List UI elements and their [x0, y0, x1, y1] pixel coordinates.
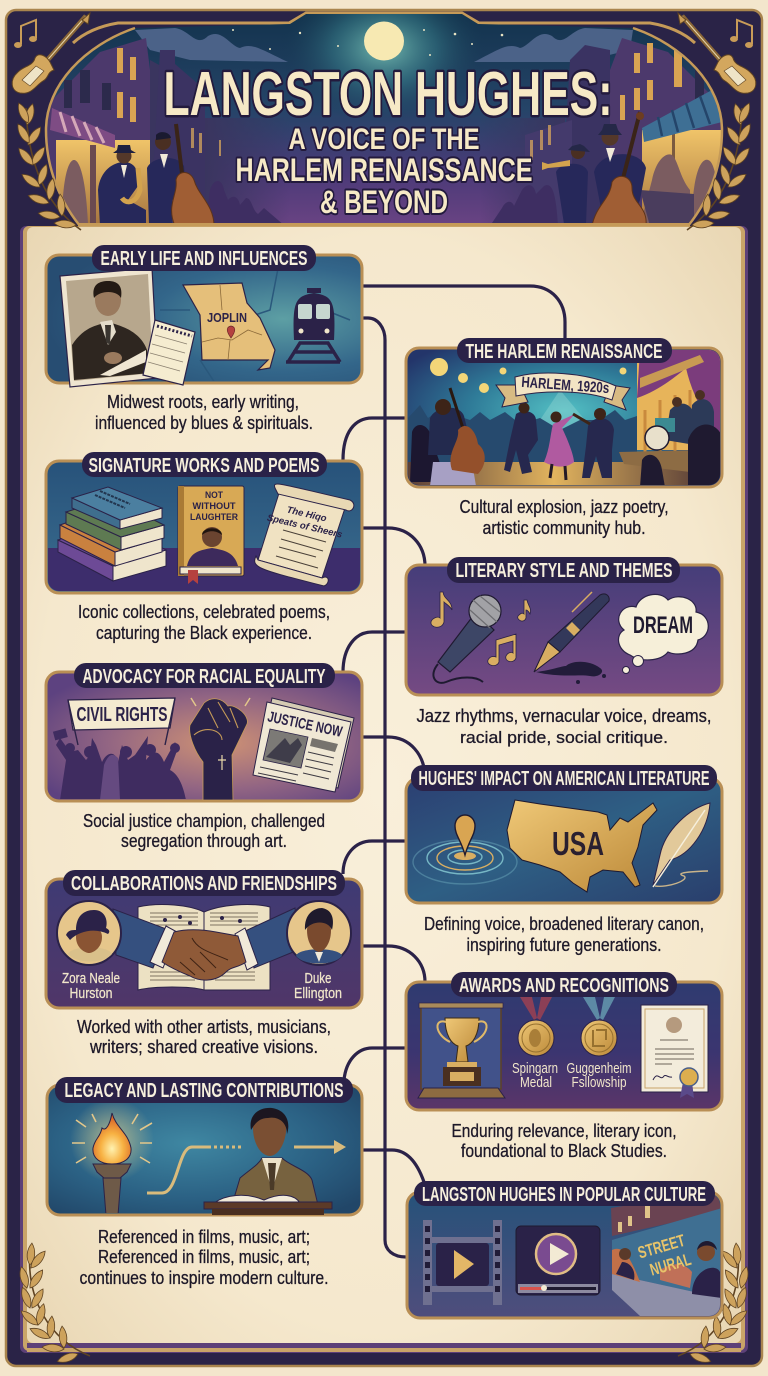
icon: Missouri map [183, 283, 275, 370]
text: advocacy [83, 811, 325, 851]
heading pill: COLLABORATIONS AND FRIENDSHIPS [71, 873, 337, 895]
icon: book stack [58, 487, 166, 581]
title [164, 60, 612, 220]
labels: names: Zora Neale [62, 970, 120, 987]
labels: names: Hurston [70, 985, 112, 1002]
timeline connectors [343, 286, 565, 1257]
laurel: bottom left [18, 1243, 90, 1365]
text: signature works: Iconic collections, celebrated poems, [78, 602, 330, 622]
heading pill: LEGACY AND LASTING CONTRIBUTIONS [64, 1080, 344, 1102]
icon: newspaper: JUSTICE NOW [266, 708, 344, 741]
icon: video player [516, 1226, 600, 1295]
icon: scroll poem: Speats of Sheers [266, 513, 343, 541]
panel: The Harlem Renaissance [406, 338, 722, 487]
heading pill [447, 557, 680, 583]
panel: Hughes' Impact on American Literature [406, 765, 722, 903]
laurel: bottom right [678, 1243, 750, 1365]
text: collaborations [77, 1017, 331, 1057]
icon: Spingarn medal: Spingarn [512, 1060, 558, 1077]
icon: train [286, 288, 340, 362]
icon: film strip [423, 1220, 502, 1305]
heading pill [92, 245, 316, 271]
dance floor [408, 462, 688, 485]
arrow: path of legacy [147, 1140, 346, 1193]
text: advocacy: Social justice champion, challenged [83, 811, 325, 831]
panel: Advocacy for Racial Equality: CIVIL RIGHTS [76, 704, 168, 726]
heading pill [457, 338, 672, 363]
text: impact: inspiring future generations. [466, 935, 662, 955]
title: & BEYOND [320, 184, 448, 220]
stars [232, 29, 503, 56]
clouds [135, 28, 288, 62]
icon: guitar left with note [12, 13, 90, 93]
icon: quill feather [653, 803, 710, 887]
text: signature works [78, 602, 330, 643]
heading pill [74, 663, 335, 688]
text: early life [95, 392, 313, 433]
lights and light rays [430, 358, 626, 393]
upright bass player (right) [592, 112, 646, 226]
icon: location pin with ripples [413, 815, 517, 884]
icon: notepad [143, 320, 195, 385]
text: harlem renaissance [460, 497, 668, 538]
icon: book Not Without Laughter: WITHOUT [192, 501, 236, 512]
text: legacy: Referenced in films, music, art; [98, 1247, 310, 1267]
text: early life: influenced by blues & spirituals. [95, 413, 313, 433]
icon: guitar right with note [678, 13, 756, 93]
dancers [504, 411, 538, 474]
heading pill [451, 972, 677, 997]
stage curtains [637, 350, 722, 450]
panel: Awards and Recognitions [406, 972, 722, 1110]
heading pill: LITERARY STYLE AND THEMES [456, 560, 672, 582]
panel: Early Life and Influences [46, 245, 362, 387]
band on stage [665, 399, 714, 445]
text: legacy: continues to inspire modern culture. [80, 1268, 328, 1288]
title: A VOICE OF THE [288, 123, 480, 156]
heading pill: ADVOCACY FOR RACIAL EQUALITY [82, 666, 326, 688]
icon: microphone [433, 595, 501, 683]
crowd silhouettes [212, 182, 282, 223]
moon [364, 22, 404, 60]
panel: Legacy and Lasting Contributions [47, 1077, 362, 1215]
mural: street mural [611, 1190, 722, 1316]
mural: street mural: NURAL [648, 1250, 693, 1280]
icon: book Not Without Laughter: LAUGHTER [190, 512, 238, 523]
icon: Guggenheim medal: Fsllowship [572, 1074, 626, 1091]
icon: sepia portrait photo [60, 268, 158, 387]
portrait: Langston Hughes at lectern [204, 1108, 332, 1215]
banner: Harlem, 1920s [496, 373, 630, 410]
text: signature works: capturing the Black experience. [96, 623, 312, 643]
icon: scroll poem [255, 484, 354, 586]
icon: Missouri map: JOPLIN [207, 310, 247, 325]
text: literary style: racial pride, social critique. [460, 728, 668, 747]
icon: Guggenheim medal: Guggenheim [566, 1060, 632, 1077]
text: impact [424, 914, 704, 955]
moon glow [305, 14, 463, 102]
panel: Signature Works and Poems [46, 452, 362, 594]
icon: thought cloud DREAM [618, 594, 708, 674]
title: HARLEM RENAISSANCE [236, 152, 532, 188]
crowd [408, 405, 637, 462]
heading pill: AWARDS AND RECOGNITIONS [459, 975, 669, 997]
icon: USA map: USA [552, 825, 604, 862]
text: legacy [80, 1227, 328, 1288]
left shop window [56, 140, 150, 226]
right awning [642, 90, 722, 142]
panel: Literary Style and Themes [406, 557, 722, 695]
heading pill [82, 452, 327, 477]
heading pill [55, 1077, 353, 1103]
banner: Harlem, 1920s: HARLEM, 1920s [521, 374, 610, 397]
text: literary style: Jazz rhythms, vernacular voice, dreams, [416, 706, 712, 726]
icon: certificate [641, 1005, 708, 1098]
text: advocacy: segregation through art. [121, 831, 287, 851]
icon: torch [70, 1098, 154, 1215]
panel: Langston Hughes in Popular Culture [407, 1181, 722, 1318]
mural: street mural: STREET [636, 1231, 688, 1262]
left awning [50, 108, 115, 148]
icon: raised fist [190, 698, 250, 800]
text: early life: Midwest roots, early writing, [107, 392, 299, 412]
arch outline [46, 28, 135, 226]
far buildings, fading into the street [150, 60, 159, 164]
icon: trophy case [418, 1003, 505, 1098]
heading pill: EARLY LIFE AND INFLUENCES [100, 248, 308, 270]
icon: book Not Without Laughter: NOT [205, 490, 223, 501]
icon: open music book [138, 905, 270, 990]
icon: civil rights crowd banner [53, 728, 186, 800]
text: literary style [416, 706, 712, 747]
panel: Advocacy for Racial Equality [46, 663, 362, 801]
icon: newspaper [253, 698, 354, 792]
right building [610, 38, 721, 208]
text: harlem renaissance: Cultural explosion, jazz poetry, [460, 497, 668, 517]
icon: book Not Without Laughter [178, 486, 244, 584]
text: awards: foundational to Black Studies. [461, 1141, 667, 1161]
heading pill: SIGNATURE WORKS AND POEMS [88, 455, 320, 477]
laurel: top right [687, 101, 753, 230]
icon: thought cloud DREAM: DREAM [633, 612, 693, 639]
header illustration: Harlem street at night [40, 0, 730, 230]
panel: Collaborations and Friendships [46, 870, 362, 1008]
text: collaborations: writers; shared creative visions. [89, 1037, 318, 1057]
bass player [428, 408, 470, 455]
text: legacy: Referenced in films, music, art; [98, 1227, 310, 1247]
heading pill [63, 870, 345, 896]
upright bass player (left) [147, 124, 214, 226]
icon: Spingarn medal: Medal [520, 1074, 552, 1091]
icon: Guggenheim medal [566, 997, 632, 1091]
text: collaborations: Worked with other artists, musicians, [77, 1017, 331, 1037]
labels: names: Duke [304, 970, 332, 987]
heading pill: THE HARLEM RENAISSANCE [466, 341, 662, 363]
trumpet player [542, 144, 590, 224]
left building [47, 38, 150, 180]
labels: names [62, 970, 342, 1002]
text: awards: Enduring relevance, literary icon, [452, 1121, 676, 1141]
portrait: Zora Neale Hurston [57, 901, 121, 965]
text: impact: Defining voice, broadened literary canon, [424, 914, 704, 934]
portrait: Duke Ellington [287, 901, 351, 965]
icon: scroll poem: The Hiqo [286, 505, 328, 525]
table group [410, 425, 440, 482]
right shop window [642, 130, 721, 211]
icon: fountain pen [534, 592, 609, 684]
text: awards [452, 1121, 676, 1161]
icon: USA map [507, 800, 657, 892]
icon: music notes [431, 592, 531, 666]
icon: handshake [113, 908, 298, 980]
icon: Spingarn medal [512, 997, 558, 1091]
laurel: top left [15, 101, 81, 230]
saxophone player [98, 145, 146, 226]
text: harlem renaissance: artistic community hub. [482, 518, 646, 538]
labels: names: Ellington [294, 985, 342, 1002]
